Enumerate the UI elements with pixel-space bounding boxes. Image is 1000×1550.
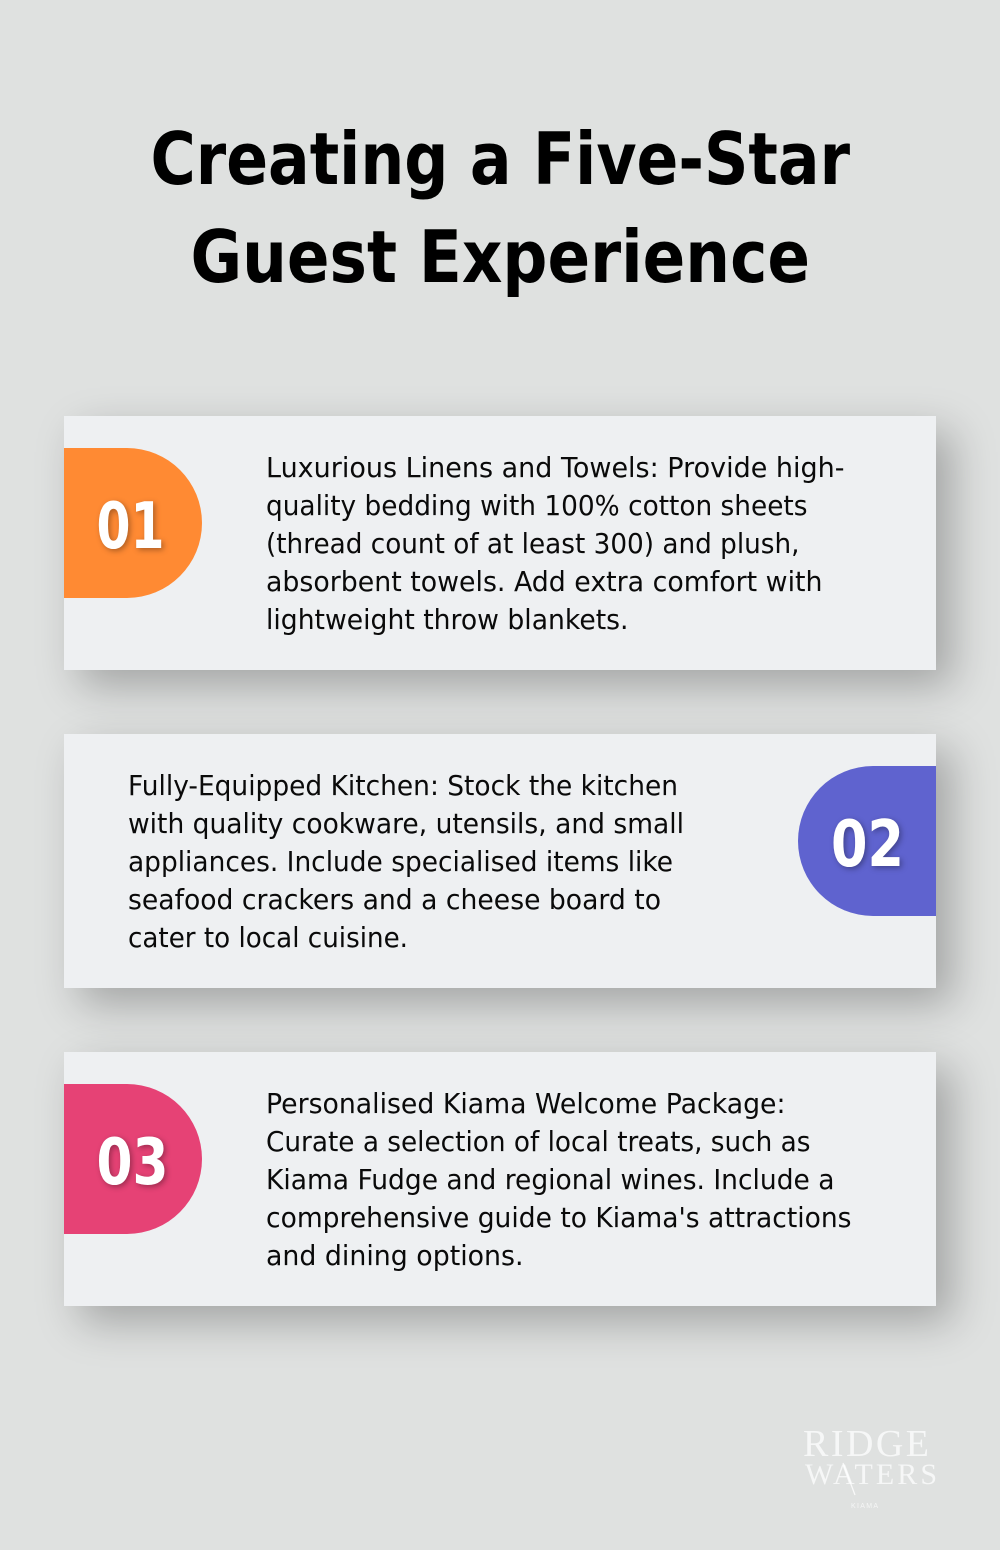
- title: [150, 117, 850, 299]
- text: welcome package description: [266, 1087, 851, 1272]
- text: kitchen description: with quality cookware, utensils, and small: [128, 807, 684, 840]
- badge: 03: 03: [96, 1126, 168, 1200]
- text: kitchen description: seafood crackers and a cheese board to: [128, 883, 661, 916]
- text: welcome package description: and dining options.: [266, 1239, 523, 1272]
- badge: 02: 02: [831, 808, 904, 882]
- logo: Ridge Waters Kiama: WATERS: [805, 1458, 937, 1491]
- logo: Ridge Waters Kiama: [803, 1423, 937, 1510]
- badge: 03: [64, 1084, 202, 1234]
- badge: 02: [798, 766, 936, 916]
- text: welcome package description: Kiama Fudge and regional wines. Include a: [266, 1163, 834, 1196]
- title: Creating a Five-Star: [150, 117, 850, 201]
- text: linens description: [266, 451, 844, 636]
- panel: personalised welcome package: [64, 1052, 936, 1306]
- text: linens description: lightweight throw blankets.: [266, 603, 628, 636]
- text: kitchen description: appliances. Include specialised items like: [128, 845, 673, 878]
- text: linens description: Luxurious Linens and Towels: Provide high-: [266, 451, 844, 484]
- text: kitchen description: [128, 769, 684, 954]
- logo: Ridge Waters Kiama: KIAMA: [851, 1503, 878, 1510]
- badge: 01: [64, 448, 202, 598]
- text: welcome package description: Personalised Kiama Welcome Package:: [266, 1087, 785, 1120]
- text: welcome package description: comprehensive guide to Kiama's attractions: [266, 1201, 851, 1234]
- text: linens description: (thread count of at least 300) and plush,: [266, 527, 799, 560]
- text: kitchen description: cater to local cuisine.: [128, 921, 408, 954]
- logo: Ridge Waters Kiama: RIDGE: [803, 1423, 929, 1465]
- text: linens description: quality bedding with 100% cotton sheets: [266, 489, 807, 522]
- text: welcome package description: Curate a selection of local treats, such as: [266, 1125, 810, 1158]
- panel: luxurious linens and towels: [64, 416, 936, 670]
- panel: fully-equipped kitchen: [64, 734, 936, 988]
- title: Guest Experience: [190, 215, 810, 299]
- badge: 01: 01: [96, 490, 164, 564]
- text: linens description: absorbent towels. Add extra comfort with: [266, 565, 822, 598]
- text: kitchen description: Fully-Equipped Kitchen: Stock the kitchen: [128, 769, 678, 802]
